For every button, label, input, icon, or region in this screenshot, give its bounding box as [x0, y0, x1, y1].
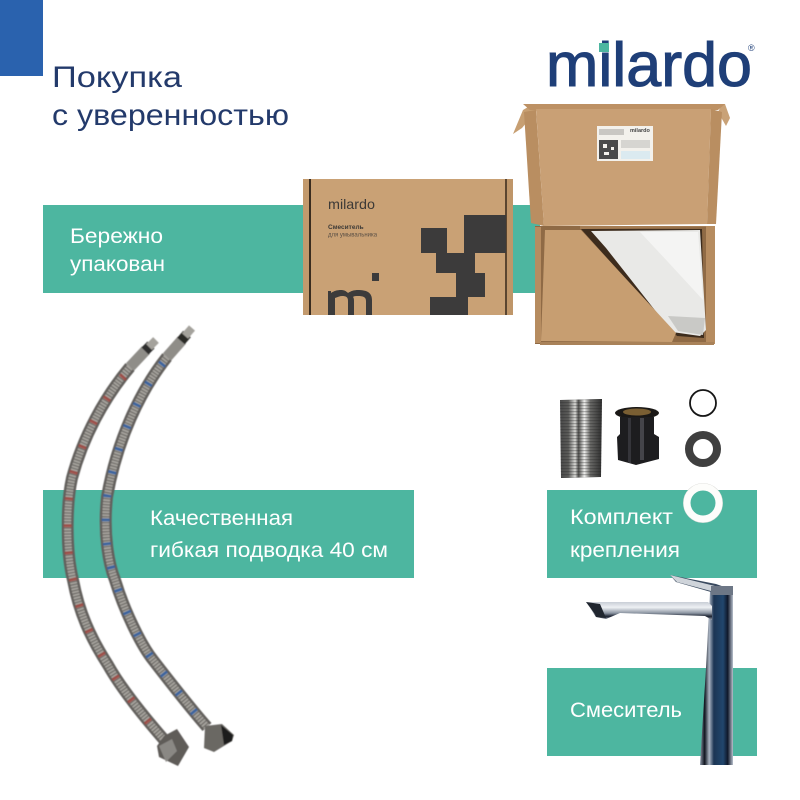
- blue corner block: [0, 0, 43, 76]
- panel: flexible hose band: гибкая подводка 40 см: [150, 539, 388, 562]
- closed kraft box: Смеситель: [328, 224, 364, 231]
- black plastic nut: [615, 407, 659, 465]
- flexible hose: red line: [68, 340, 189, 766]
- closed kraft box: [303, 179, 513, 315]
- QR label: [597, 126, 653, 161]
- panel: mounting kit band: [547, 490, 757, 578]
- closed kraft box: milardo: [328, 196, 375, 212]
- threaded metal tube: [560, 399, 602, 478]
- QR label: milardo: [630, 128, 651, 134]
- logo: milardo: milardo: [546, 31, 752, 100]
- rubber washer: [689, 435, 717, 463]
- chrome faucet: [586, 575, 733, 765]
- logo: milardo: ®: [748, 43, 755, 53]
- O-ring: [690, 390, 716, 416]
- panel: faucet band: [547, 668, 757, 756]
- title: Покупка: [52, 61, 182, 94]
- white washer: [684, 484, 722, 522]
- panel: carefully packed band: Бережно: [70, 225, 163, 248]
- title: [52, 61, 289, 132]
- open kraft box: [513, 104, 730, 345]
- flexible hose: blue line: [106, 328, 234, 752]
- panel: faucet band: Смеситель: [570, 699, 682, 722]
- panel: carefully packed band: [43, 205, 540, 293]
- panel: mounting kit band: Комплект: [570, 506, 673, 529]
- panel: mounting kit band: крепления: [570, 539, 680, 562]
- title: с уверенностью: [52, 99, 289, 132]
- panel: carefully packed band: упакован: [70, 253, 165, 276]
- closed kraft box: для умывальника: [328, 232, 378, 238]
- panel: flexible hose band: Качественная: [150, 507, 293, 530]
- panel: flexible hose band: [43, 490, 414, 578]
